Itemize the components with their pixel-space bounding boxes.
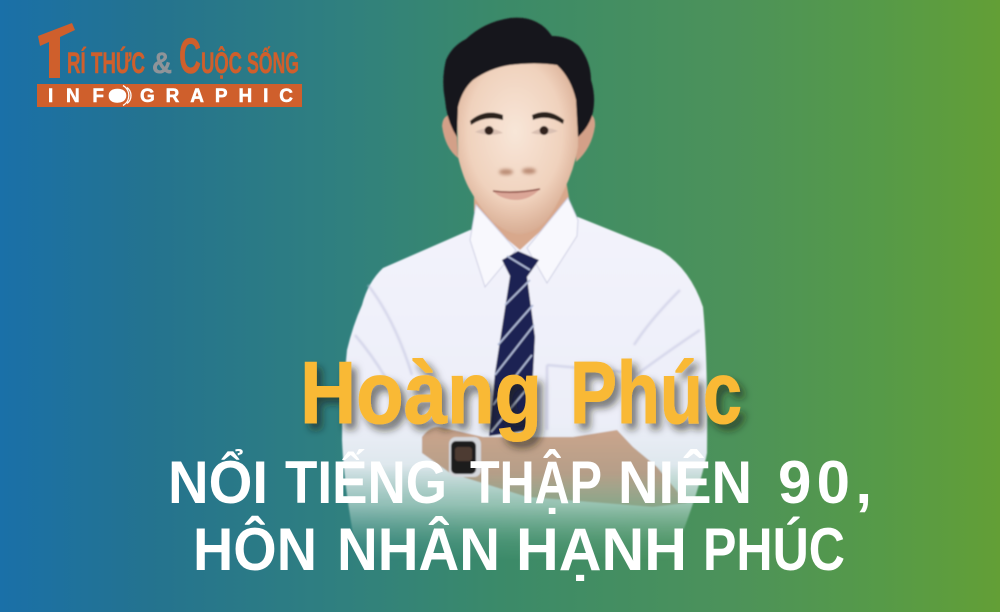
left eyebrow bbox=[470, 113, 503, 125]
headline line 2: HÔN bbox=[193, 516, 317, 583]
headline line 1: THẬP bbox=[470, 449, 602, 516]
headline line 2: NHÂN bbox=[337, 516, 500, 583]
headline line 2: PHÚC bbox=[703, 516, 845, 583]
shirt body bbox=[342, 217, 707, 560]
headline line 1: NIÊN bbox=[618, 449, 752, 516]
logo wordmark: UỘC bbox=[201, 46, 242, 80]
logo wordmark: C bbox=[179, 28, 201, 84]
smartwatch bbox=[449, 437, 481, 477]
headline line 1: NỔI bbox=[168, 449, 268, 516]
face bbox=[457, 58, 578, 234]
logo wordmark: SỐNG bbox=[247, 46, 299, 80]
tie bbox=[489, 251, 539, 436]
collar left bbox=[470, 205, 516, 287]
name heading: Hoàng bbox=[300, 343, 542, 442]
mouth bbox=[493, 189, 540, 200]
headline line 2: HẠNH bbox=[516, 516, 687, 583]
shirt folds bbox=[355, 285, 700, 430]
banner text: O bbox=[108, 86, 127, 108]
collar right bbox=[527, 198, 578, 283]
logo wordmark: RÍ THỨC bbox=[67, 46, 145, 80]
nose bbox=[499, 168, 536, 175]
right eye bbox=[531, 126, 558, 135]
photo: man in white shirt and striped tie bbox=[342, 18, 707, 560]
crossed forearm bbox=[422, 427, 687, 507]
headline line 2 bbox=[193, 516, 845, 583]
name heading: Phúc bbox=[570, 343, 742, 442]
logo wordmark bbox=[67, 28, 299, 84]
logo banner bbox=[37, 84, 302, 107]
logo: Tri Thức & Cuộc Sống Infographic bbox=[37, 23, 302, 108]
right eyebrow bbox=[532, 112, 564, 124]
hair bbox=[443, 18, 594, 137]
banner text bbox=[48, 86, 293, 108]
logo T roof mark bbox=[38, 23, 75, 78]
left ear bbox=[442, 115, 458, 158]
left eye bbox=[475, 126, 503, 135]
headline line 1: TIẾNG bbox=[285, 449, 447, 516]
right ear bbox=[576, 114, 595, 162]
logo wordmark: & bbox=[152, 47, 172, 80]
banner target icon bbox=[112, 86, 131, 106]
headline line 1 bbox=[168, 449, 872, 516]
neck bbox=[474, 180, 570, 250]
banner text: INF bbox=[48, 86, 104, 107]
name heading bbox=[300, 343, 742, 442]
headline line 1: 90, bbox=[778, 449, 872, 516]
banner text: GRAPHIC bbox=[140, 86, 293, 107]
